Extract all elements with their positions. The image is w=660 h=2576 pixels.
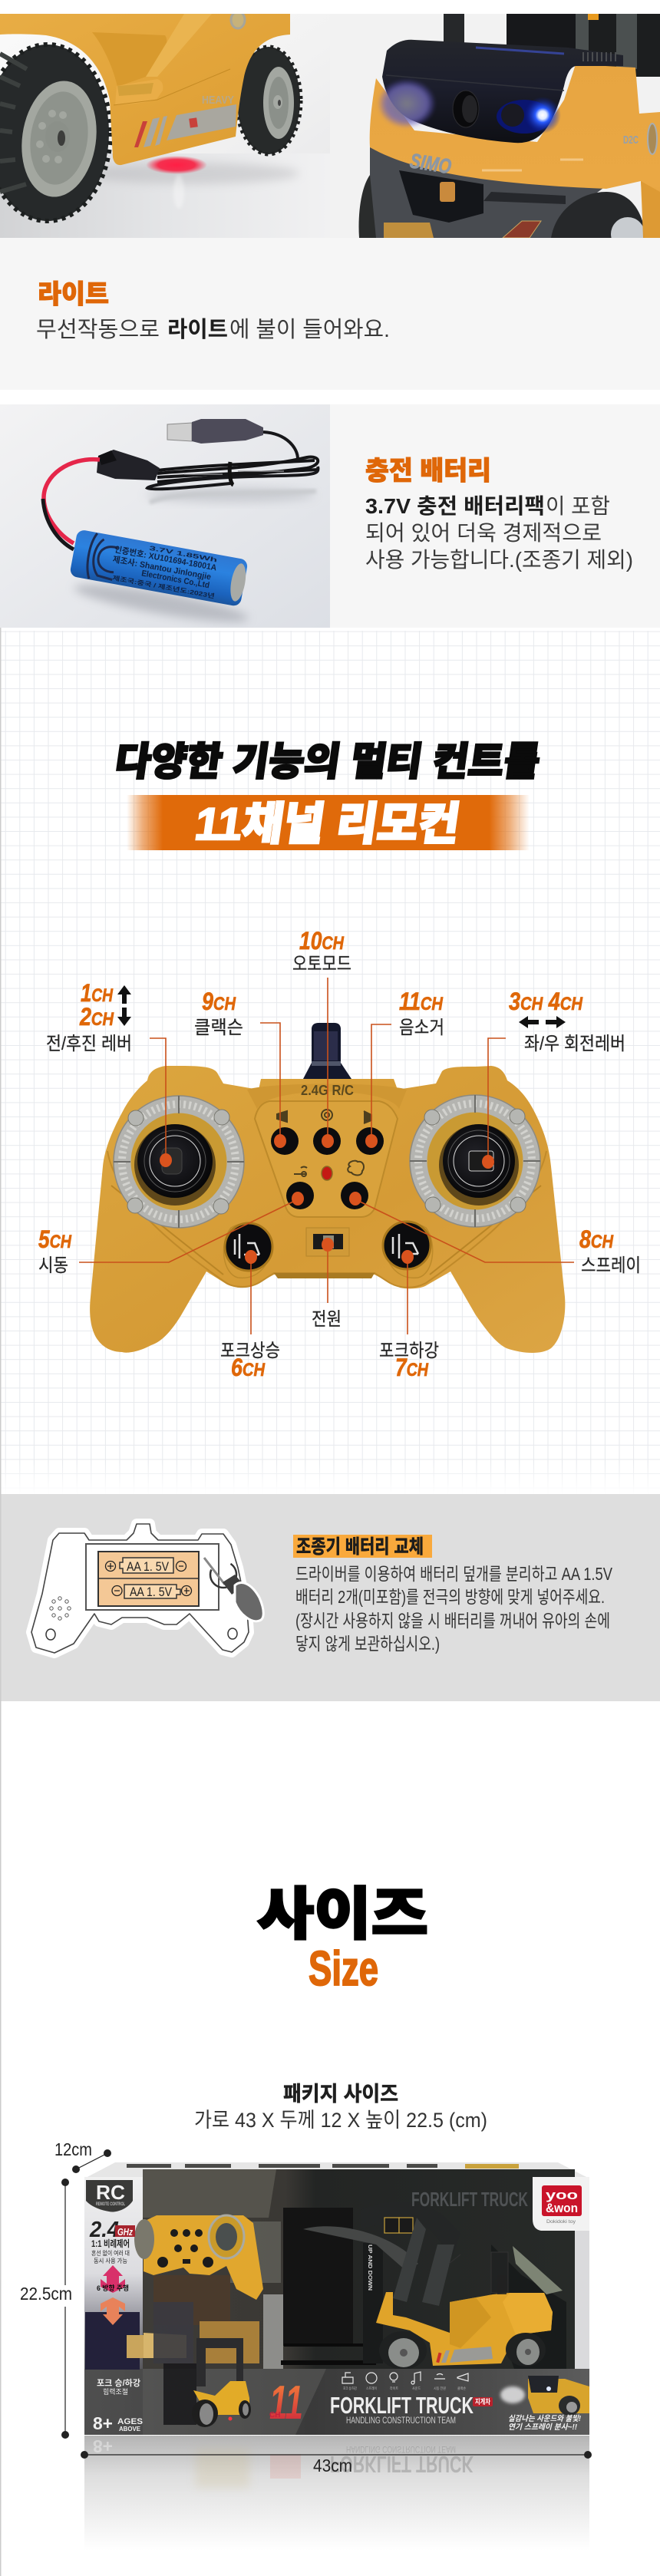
text: 2.4GHz: 2.4: [89, 2218, 119, 2242]
label: power: 전원: [312, 1309, 342, 1330]
text: 2.4GHz: GHz: [117, 2226, 133, 2238]
label: 8CH spray: 8CH: [579, 1225, 614, 1253]
text: ghost logo: FORKLIFT TRUCK: [411, 2188, 528, 2211]
fork icons on round buttons: [235, 1234, 418, 1258]
panel: light description: [0, 238, 660, 390]
feature icons row: 시동 전원: [434, 2386, 446, 2390]
icon: KC mark: [86, 533, 118, 581]
label: 10CH auto mode: 10CH: [299, 927, 345, 955]
dimension: width 43cm: 43cm: [313, 2456, 352, 2475]
text: light description: 무선작동으로: [36, 318, 160, 342]
buttons: [225, 1127, 431, 1271]
label: 3CH 4CH left/right lever: 좌/우 회전레버: [524, 1034, 625, 1054]
text: sound and light slogan: 실감나는 사운드와 불빛!: [508, 2414, 582, 2423]
LED indicator: [322, 1166, 332, 1180]
text: replacement instructions: 닿지 않게 보관하십시오.): [295, 1634, 440, 1654]
battery 2: [112, 1585, 192, 1599]
box reflection: 8+: [93, 2436, 113, 2456]
toy forklift in box: [376, 2275, 553, 2370]
box reflection: [84, 2436, 589, 2551]
RC badge: [86, 2180, 133, 2212]
text: FORKLIFT TRUCK logo: HANDLING CONSTRUCTION TEAM: [346, 2415, 456, 2426]
text: battery description: [365, 494, 633, 572]
brand logo card: yoo: [546, 2188, 578, 2202]
forklift front thumbnail: [500, 2376, 589, 2416]
text: age 8+: 8+: [93, 2413, 113, 2433]
heading: Size english: Size: [309, 1942, 378, 1996]
label: 9CH klaxon: 9CH: [202, 988, 236, 1015]
battery 1: [106, 1558, 186, 1574]
text: battery label: 인증번호: XU101694-18001A: [114, 545, 217, 573]
box reflection: HANDLING CONSTRUCTION TEAM: [346, 2444, 456, 2455]
label: 6CH fork up: [220, 1341, 280, 1381]
box reflection: FORKLIFT TRUCK: [330, 2451, 474, 2478]
text: up and down on mast: UP AND DOWN: [367, 2245, 372, 2291]
label: HEAVY decal: HEAVY: [202, 94, 234, 107]
box top face: [84, 2162, 589, 2179]
dimension: width 43cm: [81, 2451, 592, 2475]
text: battery label: 제조국:중국 / 제조년도:2023년: [112, 574, 216, 600]
photo: rechargeable battery and USB cable: [0, 404, 330, 629]
text: package dimensions: 가로 43 X 두께 12 X 높이 22.5 (cm): [194, 2109, 487, 2132]
text: light description: 에 불이 들어와요.: [229, 318, 390, 342]
text: fork up/down label: 힘력조절: [103, 2387, 128, 2396]
feature icons row: 스프레이: [366, 2386, 377, 2391]
feature icons row: [342, 2372, 468, 2391]
label: model decal: D2C: [623, 134, 639, 147]
text: age 8+: [93, 2413, 143, 2433]
label: 3CH 4CH left/right lever: [509, 988, 625, 1054]
warning labels: [384, 2218, 413, 2233]
product photo: packaged forklift box: [84, 2162, 589, 2551]
box bottom band: [84, 2369, 589, 2435]
text: battery label: 제조사: Shantou Jinlongjie: [112, 553, 212, 582]
feature icons row: 포크 승/하강: [343, 2386, 357, 2391]
left joystick: [114, 1096, 244, 1228]
text: battery label: Electronics Co.,Ltd: [140, 569, 210, 590]
battery 1: AA 1. 5V: [127, 1559, 170, 1574]
label: 10CH auto mode: 오토모드: [292, 954, 351, 975]
text: battery description: 이 포함: [546, 494, 610, 518]
text: FORKLIFT TRUCK logo: [330, 2392, 493, 2426]
label: 1CH 2CH forward/back lever: 2CH: [79, 1003, 114, 1031]
label: 1CH 2CH forward/back lever: 1CH: [81, 979, 114, 1007]
feature icons row: 클랙슨: [457, 2386, 466, 2391]
label: 8CH spray: [579, 1225, 641, 1276]
text: battery label: [112, 546, 216, 599]
text: 11 CH emblem: CH: [269, 2411, 280, 2419]
RC badge: RC: [96, 2181, 125, 2204]
heading: rechargeable battery: 충전 배터리: [365, 457, 491, 486]
text: sound and light slogan: [508, 2414, 582, 2432]
diagram: remote controller: [79, 978, 574, 1353]
label: 6CH fork up: 6CH: [231, 1354, 266, 1381]
text: age 8+: AGES: [117, 2417, 143, 2426]
label: 5CH start: [38, 1225, 72, 1276]
text: fork up/down label: [97, 2378, 140, 2396]
text: battery label: 3.7V 1.85Wh: [149, 545, 218, 564]
text: 2.4G R/C: 2.4G R/C: [301, 1083, 354, 1098]
remote on packaging: [134, 2215, 263, 2300]
text: age 8+: ABOVE: [119, 2426, 141, 2433]
RC badge: REMOTE CONTROL: [96, 2202, 125, 2207]
panel: remote battery replacement: [0, 1494, 660, 1701]
center button panel: [255, 1101, 398, 1217]
icons on button panel: [277, 1110, 371, 1176]
dimension: depth 12cm: 12cm: [54, 2139, 92, 2159]
heading: multi control: 다양한 기능의 멀티 컨트롤: [112, 740, 543, 783]
icon: screwdriver: [204, 1558, 263, 1621]
crates and container: [85, 2312, 259, 2370]
label: 11CH mute: 11CH: [399, 988, 444, 1015]
text: sound and light slogan: 연기 스프레이 분사~!!: [508, 2423, 578, 2432]
text: fork up/down label: 포크 승/하강: [97, 2378, 140, 2388]
label: 7CH fork down: [379, 1341, 439, 1381]
heading: size: 사이즈: [257, 1882, 428, 1946]
panel: battery description: [330, 404, 660, 628]
text: replacement instructions: [295, 1564, 613, 1654]
banner: 11 channel remote: 11채널 리모컨: [192, 798, 464, 849]
controller body: [90, 1066, 565, 1353]
label: 1CH 2CH forward/back lever: [46, 979, 132, 1054]
text: battery description: 되어 있어 더욱 경제적으로: [365, 521, 602, 545]
label: 5CH start: 시동: [38, 1255, 68, 1276]
feature icons row: 라이트: [390, 2386, 398, 2391]
illustration: controller back with AA batteries: [31, 1524, 263, 1653]
text: light description: [36, 317, 390, 342]
heading: light: 라이트: [38, 280, 109, 309]
label: 11CH mute: 음소거: [399, 1018, 444, 1038]
dimension: depth 12cm: [54, 2139, 111, 2173]
photo: forklift front with blue light and smoke: [330, 14, 660, 251]
heading: replacing remote battery: 조종기 배터리 교체: [296, 1536, 424, 1558]
small forklift on packaging: [153, 2302, 251, 2427]
brand logo card: &won: [546, 2201, 578, 2215]
text: 11 CH emblem: 11: [269, 2376, 303, 2429]
text: side features: [91, 2238, 130, 2264]
text: light description: 라이트: [167, 317, 228, 342]
dimension: height 22.5cm: [20, 2179, 72, 2439]
banner: 11 channel remote: [127, 795, 530, 850]
label: 1CH 2CH forward/back lever: 전/후진 레버: [46, 1034, 132, 1054]
right joystick: [410, 1095, 540, 1227]
label: 9CH klaxon: 클랙슨: [194, 1018, 243, 1038]
text: FORKLIFT TRUCK logo: 지게차: [475, 2397, 491, 2406]
box window interior: [143, 2169, 575, 2370]
leader lines and dots: [79, 978, 574, 1334]
brand logo card: [533, 2177, 589, 2231]
label: 10CH auto mode: [292, 927, 351, 975]
text: side features: 혼선 없이 여러 대: [91, 2249, 130, 2257]
dimension: height 22.5cm: 22.5cm: [20, 2284, 72, 2304]
label: 11CH mute: [399, 988, 444, 1038]
label: SIMO decal: SIMO: [408, 149, 453, 178]
text: FORKLIFT TRUCK logo: FORKLIFT TRUCK: [330, 2392, 474, 2419]
right strip: [575, 2231, 589, 2369]
icon: six direction arrows: 6 방향 주행: [97, 2284, 129, 2292]
text: side features: 동시 사용 가능: [94, 2258, 127, 2264]
box left strip: [84, 2177, 143, 2370]
photo: forklift side with red light: [0, 12, 330, 238]
text: 2.4GHz: [89, 2218, 135, 2242]
power switch: [306, 1228, 349, 1256]
label: 9CH klaxon: [194, 988, 243, 1038]
label: 7CH fork down: 포크하강: [379, 1341, 439, 1361]
text: battery description: 3.7V 충전 배터리팩: [365, 494, 545, 518]
text: package size heading: 패키지 사이즈: [283, 2083, 398, 2106]
feature icons row: 사운드: [412, 2386, 421, 2391]
label: 8CH spray: 스프레이: [581, 1255, 641, 1276]
panel: remote control grid section: [0, 628, 660, 1494]
brand logo card: Dokidoki toy: [546, 2220, 576, 2225]
text: side features: 1:1 비례제어: [91, 2238, 130, 2249]
battery 2: AA 1. 5V: [130, 1585, 173, 1599]
label: 5CH start: 5CH: [38, 1225, 72, 1253]
label: 3CH 4CH left/right lever: 3CH 4CH: [509, 988, 583, 1015]
controller antenna: [303, 1023, 351, 1079]
label: 7CH fork down: 7CH: [395, 1354, 429, 1381]
label: 6CH fork up: 포크상승: [220, 1341, 280, 1361]
icon: six direction arrows: [97, 2265, 129, 2325]
text: 11 CH emblem: [269, 2376, 303, 2429]
text: battery description: 사용 가능합니다.(조종기 제외): [365, 548, 633, 572]
